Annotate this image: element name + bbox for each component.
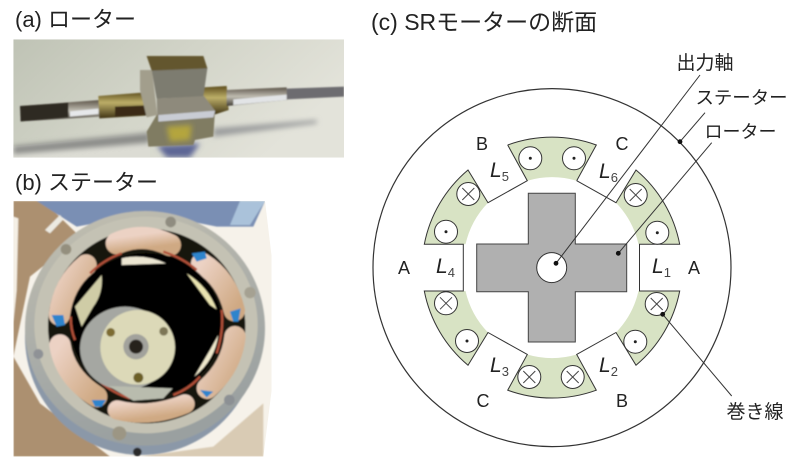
part labels: 出力軸	[676, 52, 734, 74]
photo: rotor	[13, 39, 344, 158]
title: (c) SR motor cross-section: (c) SRモーターの断面	[371, 9, 597, 35]
coil labels: L	[436, 255, 448, 278]
phase labels: C	[616, 134, 628, 154]
photo: stator	[13, 201, 272, 457]
coil labels	[436, 159, 671, 379]
phase labels	[398, 134, 700, 411]
leader dots	[554, 139, 682, 317]
leader lines	[556, 75, 732, 396]
part labels	[676, 52, 787, 423]
output shaft	[537, 253, 567, 283]
winding crosses	[440, 188, 663, 383]
stator green pole pieces	[424, 137, 680, 398]
phase labels: C	[476, 391, 490, 411]
rotor	[477, 193, 627, 342]
stator outlines	[424, 137, 680, 398]
phase labels: A	[398, 258, 410, 278]
stator outer circle	[373, 89, 731, 447]
diagram: SR motor cross-section	[373, 52, 787, 447]
coil labels: L	[490, 159, 502, 182]
phase labels: A	[688, 258, 700, 278]
title: (b) stator: (b) ステーター	[15, 170, 158, 195]
phase labels: B	[476, 134, 488, 154]
coil labels: 1	[664, 265, 671, 280]
coil labels: 5	[502, 169, 509, 184]
coil labels: L	[490, 354, 502, 377]
coil labels: L	[599, 354, 611, 377]
part labels: ローター	[704, 122, 776, 142]
coil labels: L	[652, 255, 664, 278]
coil labels: 4	[448, 265, 455, 280]
winding circles: cross	[434, 182, 668, 388]
winding dots	[444, 157, 659, 343]
coil labels: 3	[502, 364, 509, 379]
part labels: 巻き線	[726, 401, 784, 423]
winding circles: dot	[434, 147, 669, 353]
coil labels: L	[599, 160, 611, 183]
part labels: ステーター	[696, 87, 787, 108]
coil labels: 6	[611, 170, 618, 185]
phase labels: B	[616, 391, 628, 411]
title: (a) rotor: (a) ローター	[15, 7, 136, 32]
coil labels: 2	[611, 364, 618, 379]
